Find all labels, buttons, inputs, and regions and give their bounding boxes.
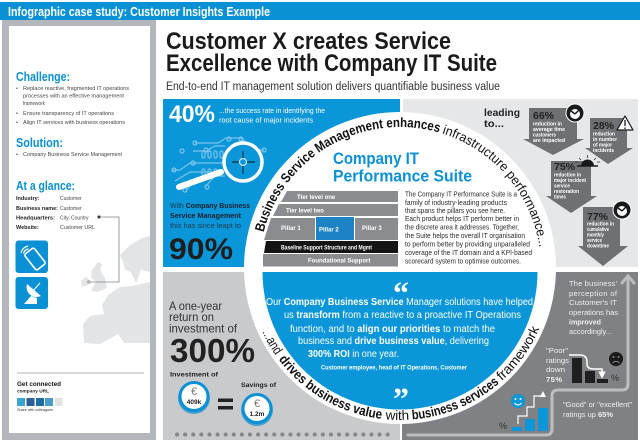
at a glance: Website: <box>16 225 39 231</box>
icon: clock <box>566 104 584 122</box>
challenge: framework <box>23 101 45 107</box>
with company business text: With Company Business <box>170 201 250 210</box>
savings coin: Savings of <box>241 382 277 389</box>
with company business text: this has since leapt to <box>170 221 241 230</box>
stat description: ...the success rate in identifying the <box>219 106 325 115</box>
suite description: the Suite helps the overall IT organisation <box>405 231 525 240</box>
stat 40%: 40% <box>169 101 215 128</box>
arrow: 77%: cumulative <box>587 227 609 233</box>
chart: good ratings bars <box>512 394 548 431</box>
quote text: us transform from a reactive to a proactive IT Operations <box>284 310 521 321</box>
get connected: Get connected <box>17 381 61 388</box>
challenge: Align IT services with business operations <box>23 120 125 126</box>
get connected: Share with colleagues <box>17 408 53 412</box>
arrow: 75%: times <box>554 194 566 200</box>
suite description: The Company IT Performance Suite is a <box>405 190 518 198</box>
percent sign: % <box>611 373 619 383</box>
icon: siren <box>575 155 600 166</box>
header bar <box>0 2 640 20</box>
equals sign <box>218 398 233 410</box>
quote text: business and drive business value, delivering <box>298 336 489 347</box>
ring text: bottom arc: with <box>386 410 408 420</box>
arrow: 77%: reduction in <box>587 222 614 228</box>
challenge: • <box>16 111 18 117</box>
title <box>166 28 497 77</box>
suite description: coverage of the IT domain and a KPI-based <box>405 248 532 257</box>
leading to heading <box>484 108 520 130</box>
arrow: 77%: downtime <box>587 244 609 250</box>
icon: satellite dish <box>16 277 48 309</box>
dotted divider <box>177 432 394 436</box>
arrow: 28% <box>585 118 633 164</box>
poor ratings text: "Poor" <box>546 346 568 355</box>
ROI description: A one-year <box>169 299 222 313</box>
staircase arrow <box>408 276 634 435</box>
at a glance: Customer <box>60 196 82 202</box>
perception text: perception of <box>569 289 618 298</box>
good ratings text: ratings up 65% <box>563 410 613 419</box>
ring text: top arc: infrastructure performance... <box>442 124 544 246</box>
poor ratings text <box>546 346 569 384</box>
with company business text <box>170 201 250 230</box>
stat 300%: 300% <box>170 332 255 369</box>
suite description: to perform better by providing unparalleled <box>405 240 530 248</box>
suite description <box>405 190 532 266</box>
investment coin: 409k <box>187 399 202 406</box>
arrow: 77%: monthly <box>587 232 604 238</box>
arrow: 28%: reduction <box>593 132 615 138</box>
ring text: bottom arc: drives business value <box>280 356 382 419</box>
ring text: bottom arc: framework <box>496 326 540 380</box>
baseline: Baseline Support Structure and Mgmt <box>281 246 372 252</box>
arrow: 28%: 28% <box>593 120 615 132</box>
perception text: Customer's IT <box>569 298 617 307</box>
arrow: 66%: are impacted <box>533 138 565 144</box>
arrow: 75%: restoration <box>554 189 579 195</box>
icon: warning triangle <box>617 116 633 130</box>
arrow: 28%: in number <box>593 137 617 143</box>
arrow: 77%: 77% <box>587 211 609 223</box>
title: Customer X creates Service <box>166 28 451 55</box>
title: Excellence with Company IT Suite <box>166 50 497 77</box>
quote text: function, and to align our priorities to match the <box>290 324 495 335</box>
investment coin <box>170 372 219 414</box>
challenge: • <box>16 86 18 92</box>
savings coin: 1.2m <box>250 411 265 418</box>
savings coin: € <box>254 398 260 410</box>
at a glance: Customer URL <box>60 225 95 231</box>
percent sign: % <box>499 421 507 431</box>
arrow: 77% <box>578 207 628 266</box>
perception text: improved <box>569 318 601 326</box>
perception text: The business' <box>569 279 618 288</box>
arrow: 66% <box>523 108 584 155</box>
pillar two: Pillar 2 <box>319 228 339 234</box>
perception text <box>569 279 618 336</box>
good ratings text <box>563 400 632 419</box>
icon: sad face <box>609 352 623 366</box>
leading to heading: leading <box>484 108 520 119</box>
arrow: 66%: average time <box>533 127 565 133</box>
suite pillars diagram <box>263 191 398 266</box>
panel: left sidebar <box>2 20 156 440</box>
challenge: Challenge: <box>16 69 70 84</box>
get connected <box>17 373 144 412</box>
ROI description: investment of <box>169 322 238 336</box>
chart: poor ratings bars <box>569 355 608 383</box>
location leader line <box>88 216 119 283</box>
at a glance: City, Country <box>60 216 89 222</box>
investment coin: Investment of <box>170 372 219 378</box>
solution: Company Business Service Management <box>23 152 122 158</box>
savings coin <box>241 382 277 426</box>
map of Europe <box>81 236 150 344</box>
solution: • <box>16 152 18 158</box>
arrow: 75% <box>546 161 597 213</box>
subtitle: End-to-end IT management solution delivers quantifiable business value <box>166 81 500 93</box>
suite heading: Performance Suite <box>333 166 472 186</box>
header bar: Infographic case study: Customer Insights Example <box>8 5 270 19</box>
icon: clock <box>613 201 631 219</box>
good ratings text: "Good" or "excellent" <box>563 400 632 409</box>
suite heading <box>333 149 472 186</box>
arrow: 66%: customers <box>533 132 556 138</box>
ring text: bottom arc: business services <box>412 378 498 420</box>
suite description: scorecard system to optimise outcomes. <box>405 256 521 266</box>
with company business text: Service Management <box>170 211 241 220</box>
tier one: Tier level one <box>297 195 336 201</box>
suite description: the discrete area it addresses. Together, <box>405 222 519 232</box>
at a glance: Headquarters: <box>16 216 55 222</box>
perception text: accordingly... <box>569 327 612 336</box>
panel: customer perception <box>402 272 638 440</box>
stat description: root cause of major incidents <box>219 116 313 124</box>
at a glance: At a glance: <box>16 178 75 193</box>
pillar one: Pillar 1 <box>281 226 301 232</box>
arrow: 75%: major incident <box>554 178 586 184</box>
at a glance: Business name: <box>16 206 58 212</box>
arrow: 66%: 66% <box>533 110 555 122</box>
investment coin: € <box>191 386 197 398</box>
suite description: that spans the pillars you see here. <box>405 206 505 215</box>
arrow: 28%: of major <box>593 142 612 148</box>
ring text: top arc: Business Service Management enhances <box>254 117 440 232</box>
icon: magnifier over circuit <box>172 137 266 192</box>
panel: return on investment <box>163 272 400 440</box>
poor ratings text: down <box>546 365 565 374</box>
ring text: top arc <box>254 117 544 246</box>
arrow: 66%: reduction in <box>533 122 562 128</box>
challenge: Ensure transparency of IT operations <box>23 111 114 117</box>
leading to heading: to... <box>484 119 504 130</box>
at a glance: Industry: <box>16 196 40 202</box>
suite heading: Company IT <box>333 149 420 168</box>
quote text: 300% ROI in one year. <box>308 349 399 360</box>
panel: leading to <box>403 99 638 267</box>
stat description <box>219 106 325 124</box>
stat 90%: 90% <box>169 233 233 266</box>
get connected: company URL <box>17 388 49 394</box>
social icons <box>17 398 62 406</box>
arrow: 75%: 75% <box>554 161 576 173</box>
perception text: operations has <box>569 308 618 317</box>
arrow: 28%: incidents <box>593 148 614 154</box>
arrow: 75%: reduction in <box>554 172 581 178</box>
challenge: Replace reactive, fragmented IT operations <box>23 86 129 92</box>
central circle <box>244 112 556 424</box>
poor ratings text: 75% <box>546 375 562 384</box>
at a glance: Customer <box>60 206 82 212</box>
pillar three: Pillar 3 <box>362 226 382 232</box>
at a glance <box>16 178 95 231</box>
solution <box>16 135 122 158</box>
arrow: 75%: service <box>554 184 570 190</box>
opening quote mark: “ <box>393 274 409 310</box>
quote text: Our Company Business Service Manager solutions have helped <box>266 297 533 308</box>
challenge: processes with an effective management <box>23 94 124 100</box>
icon: smiley <box>511 394 525 408</box>
challenge: • <box>16 120 18 126</box>
poor ratings text: ratings <box>546 356 569 365</box>
challenge <box>16 69 129 126</box>
ROI description <box>169 299 238 336</box>
foundational: Foundational Support <box>308 258 370 264</box>
quote text <box>266 297 533 360</box>
ring text: bottom arc <box>262 326 540 420</box>
closing quote mark: ” <box>393 380 409 416</box>
quote attribution: Customer employee, head of IT Operations, Customer <box>321 364 467 372</box>
suite description: Each product helps IT perform better in <box>405 214 519 223</box>
quote panel <box>262 272 538 416</box>
solution: Solution: <box>16 135 63 150</box>
ring text: bottom arc: ...and <box>262 332 284 355</box>
suite description: family of industry-leading products <box>405 198 507 207</box>
ROI description: return on <box>169 310 214 324</box>
icon: mobile phone <box>16 240 48 273</box>
panel: 40 percent <box>163 99 400 267</box>
tier two: Tier level two <box>286 208 324 214</box>
arrow: 77%: service <box>587 238 602 244</box>
